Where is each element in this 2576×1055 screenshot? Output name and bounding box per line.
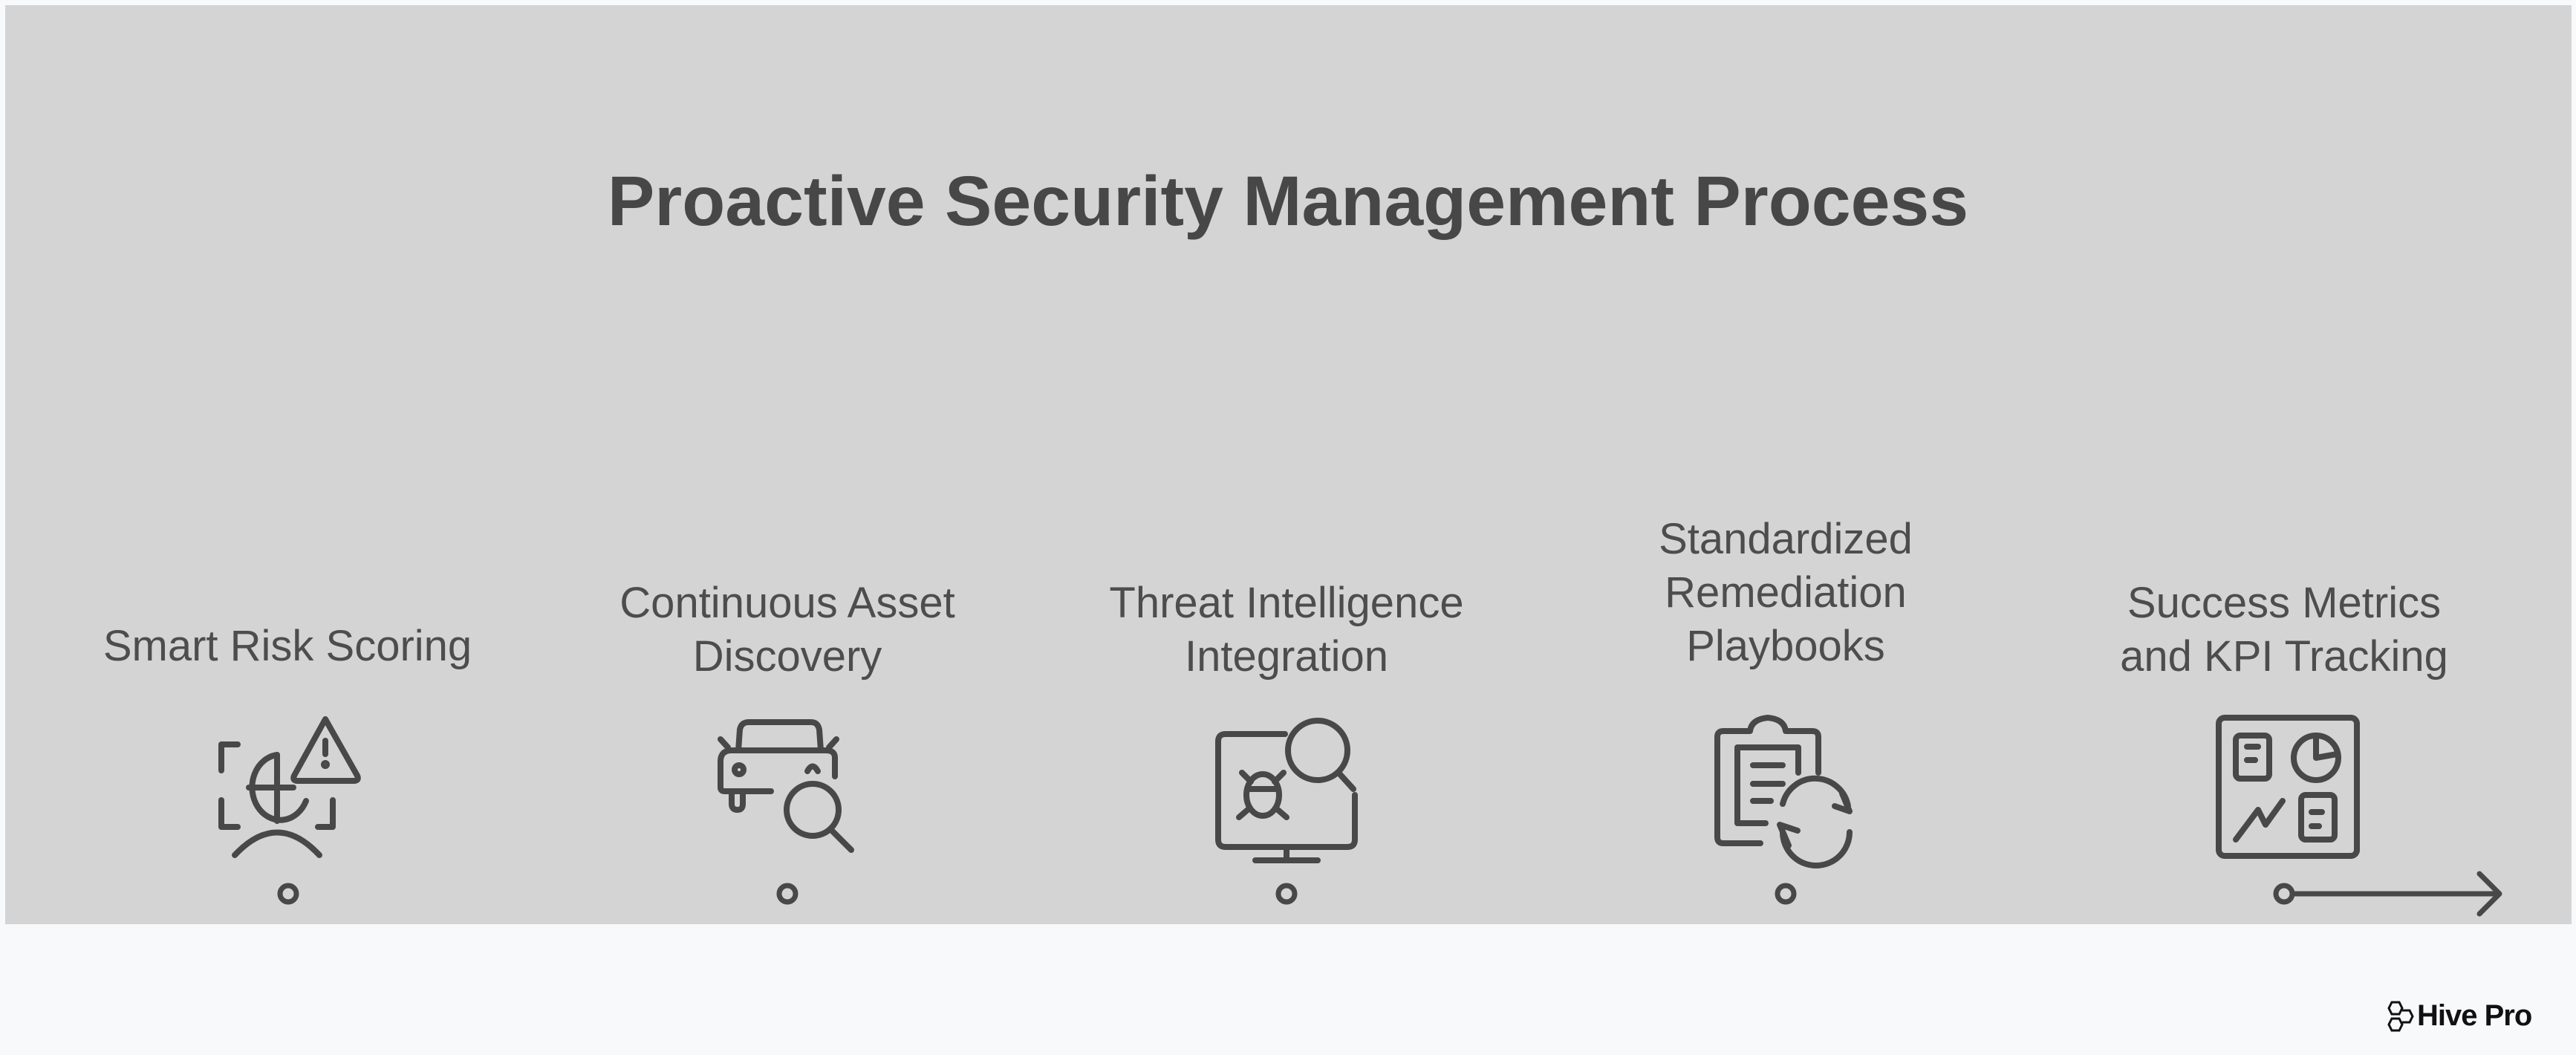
label: success metrics: and KPI Tracking xyxy=(2120,632,2448,681)
label: smart risk scoring: Smart Risk Scoring xyxy=(103,622,472,670)
label: standardized remediation playbooks: Remediation xyxy=(1665,568,1907,617)
label: continuous asset discovery xyxy=(619,579,955,681)
label: continuous asset discovery: Continuous Asset xyxy=(619,579,955,627)
icon: dashboard xyxy=(2219,718,2357,856)
timeline dots xyxy=(280,886,1794,902)
label: threat intelligence integration: Integration xyxy=(1185,632,1388,681)
icon: monitor with bug and magnifier xyxy=(1218,721,1355,860)
icon: clipboard with refresh xyxy=(1717,718,1850,866)
label: standardized remediation playbooks: Standardized xyxy=(1659,515,1913,563)
logo: Hive Pro: Hive Pro xyxy=(2417,999,2531,1032)
title: Proactive Security Management Process xyxy=(608,162,1968,241)
icon: car with magnifier xyxy=(721,722,851,850)
label: continuous asset discovery: Discovery xyxy=(693,632,882,681)
label: standardized remediation playbooks: Playbooks xyxy=(1686,622,1885,670)
label: standardized remediation playbooks xyxy=(1659,515,1913,670)
label: success metrics: Success Metrics xyxy=(2127,579,2441,627)
label: threat intelligence integration xyxy=(1109,579,1464,681)
label: threat intelligence integration: Threat Intelligence xyxy=(1109,579,1464,627)
icon: risk scoring xyxy=(221,719,358,855)
label: success metrics xyxy=(2120,579,2448,681)
arrow xyxy=(2276,874,2499,914)
